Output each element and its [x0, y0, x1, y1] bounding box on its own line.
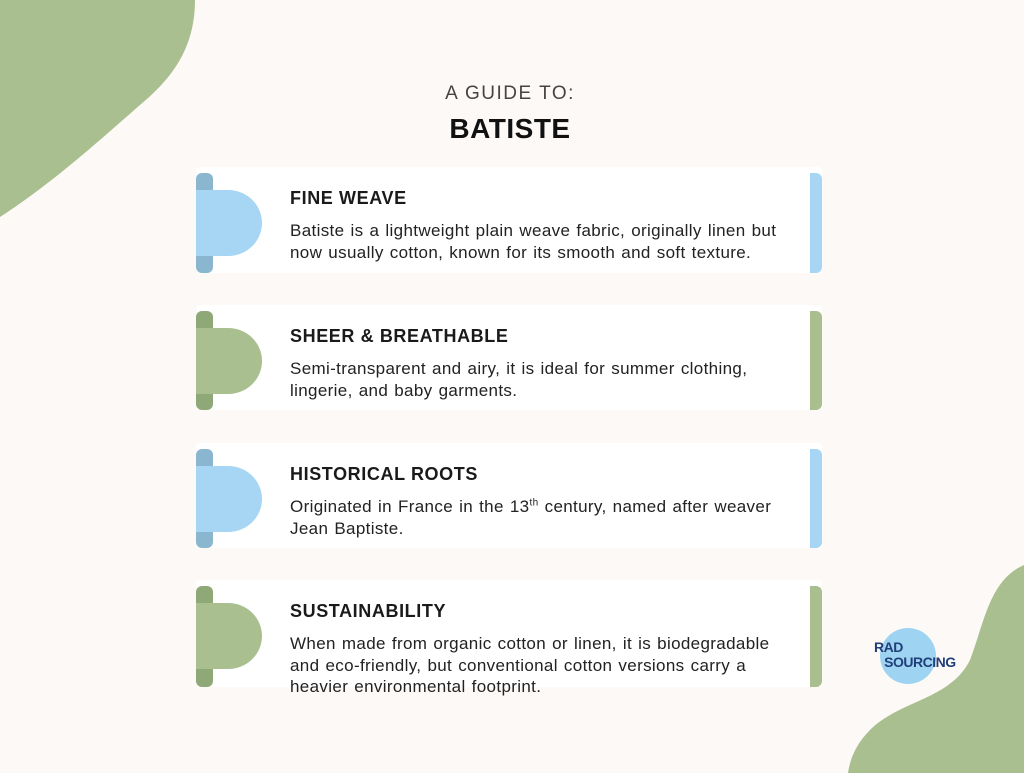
card: fine weave: [196, 167, 822, 273]
card: sustainability: heavier environmental footprint.: [290, 677, 541, 696]
card: fine weave: now usually cotton, known for its smooth and soft texture.: [290, 242, 751, 262]
card: sheer & breathable: [196, 305, 822, 410]
title: BATISTE: [449, 113, 571, 144]
card: historical roots: Jean Baptiste.: [290, 518, 404, 538]
card: historical roots: HISTORICAL ROOTS: [290, 464, 478, 484]
logo: rad sourcing: RAD: [874, 639, 903, 655]
card: fine weave: FINE WEAVE: [290, 188, 407, 208]
icon: green tab: [196, 311, 262, 410]
decorative blob: top-left: [0, 0, 195, 217]
card: historical roots: Originated in France in the 13th century, named after weaver: [290, 497, 771, 516]
logo: rad sourcing: SOURCING: [884, 654, 956, 670]
title: A GUIDE TO:: [445, 83, 575, 104]
icon: blue tab: [196, 449, 262, 548]
card: historical roots: [196, 443, 822, 548]
card: sheer & breathable: lingerie, and baby garments.: [290, 380, 517, 400]
decorative blob: bottom-right: [848, 565, 1024, 773]
icon: green tab: [196, 586, 262, 687]
card: sustainability: When made from organic cotton or linen, it is biodegradable: [290, 634, 769, 653]
card: sustainability: and eco-friendly, but conventional cotton versions carry a: [290, 656, 746, 674]
card: sustainability: SUSTAINABILITY: [290, 601, 446, 621]
card: sheer & breathable: Semi-transparent and airy, it is ideal for summer clothing,: [290, 359, 747, 378]
icon: blue tab: [196, 173, 262, 273]
card: fine weave: Batiste is a lightweight plain weave fabric, originally linen but: [290, 221, 776, 240]
card: sustainability: [196, 580, 822, 687]
title: [445, 83, 575, 144]
card: sheer & breathable: SHEER & BREATHABLE: [290, 326, 508, 346]
logo: rad sourcing: [874, 628, 956, 684]
